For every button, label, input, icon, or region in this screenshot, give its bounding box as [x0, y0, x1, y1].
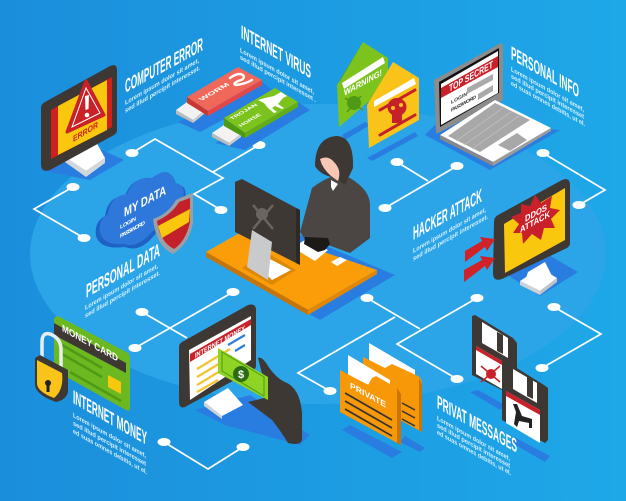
personal info heading and text: Lorem ipsum dolor sit amet, — [511, 65, 584, 114]
internet money heading and text: Lorem ipsum dolor sit amet, — [73, 411, 146, 460]
internet virus heading and text: Lorem ipsum dolor sit amet, — [240, 46, 314, 96]
computer error heading and text — [125, 34, 203, 115]
icon: trojan horse usb — [212, 88, 310, 150]
icon: hand with banknote — [218, 348, 302, 444]
hacker desk scene — [206, 136, 395, 320]
icon: my data cloud: PASSWORD — [120, 221, 145, 240]
privat messages heading and text: sed illud percipit interesset — [437, 421, 511, 470]
icon: internet money monitor — [179, 305, 310, 445]
icon: ddos attack monitor — [493, 179, 578, 296]
hacker — [300, 136, 370, 253]
keyboard and mouse — [300, 237, 347, 266]
icon: ddos attack monitor: ATTACK — [520, 209, 550, 236]
hacker attack heading and text: sed illud percipit interesset. — [413, 213, 488, 263]
privat messages heading and text: ed suas omnes debitis, ut el. — [437, 428, 511, 477]
icon: trojan horse usb: HORSE — [237, 112, 263, 128]
personal data heading and text: sed illud percipit interesset. — [85, 269, 160, 320]
background ellipse — [30, 104, 606, 404]
icon: money card: MONEY CARD — [62, 323, 118, 365]
icon: worm usb — [176, 67, 275, 132]
desk — [206, 227, 377, 315]
icon: hand with banknote: $ — [238, 369, 244, 381]
icon: floppy disks — [470, 315, 550, 462]
icon: error monitor: ERROR — [73, 119, 98, 144]
internet money heading and text: ed suas omnes debitis, ut el. — [73, 427, 147, 476]
icon: private folders — [340, 343, 425, 458]
icon: laptop: TOP SECRET — [449, 59, 493, 95]
icon: private folders: PRIVATE — [350, 381, 386, 410]
text: PERSONAL DATA — [86, 239, 160, 303]
icon: trojan horse usb: TROJAN — [228, 103, 259, 121]
internet virus heading and text — [240, 21, 316, 104]
privat messages heading and text — [437, 392, 517, 477]
personal info heading and text: sed illud percipit interesset — [511, 72, 585, 121]
icon: my data cloud: MY DATA — [124, 182, 166, 220]
personal data heading and text: Lorem ipsum dolor sit amet, — [85, 262, 158, 312]
icon: shield — [153, 193, 193, 254]
icon: my data cloud: LOGIN — [120, 216, 136, 231]
internet money heading and text — [73, 386, 147, 476]
text: INTERNET VIRUS — [241, 21, 311, 83]
icon: red arrows — [464, 237, 495, 282]
icon: internet money monitor: INTERNET MONEY — [195, 323, 245, 360]
icon: warning envelopes: WARNING! — [344, 68, 382, 99]
icon: laptop: LOGIN — [451, 91, 467, 106]
icon: warning envelopes — [337, 42, 419, 161]
icon: ddos attack monitor: DDOS — [525, 202, 547, 225]
text: INTERNET MONEY — [73, 386, 147, 450]
icon: laptop: PASSWORD — [451, 94, 476, 114]
icon: laptop — [425, 43, 560, 170]
icon: money card — [54, 316, 130, 411]
internet virus heading and text: sed illud percipit interesset . — [240, 53, 316, 104]
hacker attack heading and text — [413, 185, 488, 263]
computer error heading and text: Lorem ipsum dolor sit amet, — [125, 57, 199, 107]
personal info heading and text: ed suas omnes debitis, ut el. — [511, 79, 585, 128]
computer error heading and text: sed illud percipit interesset. — [125, 64, 200, 115]
icon: my data cloud — [96, 172, 186, 248]
computer — [235, 179, 300, 285]
connector lines — [34, 139, 605, 469]
personal data heading and text — [85, 239, 160, 320]
icon: worm usb: WORM — [197, 82, 231, 102]
privat messages heading and text: Lorem ipsum dolor sit amet, — [437, 414, 510, 463]
icon: error monitor — [40, 65, 124, 180]
internet money heading and text: sed illud percipit interesset — [73, 419, 147, 468]
icon: padlock — [35, 334, 68, 402]
hacker attack heading and text: Lorem ipsum dolor sit amet, — [413, 206, 486, 255]
text: HACKER ATTACK — [413, 185, 482, 245]
personal info heading and text — [511, 42, 585, 128]
